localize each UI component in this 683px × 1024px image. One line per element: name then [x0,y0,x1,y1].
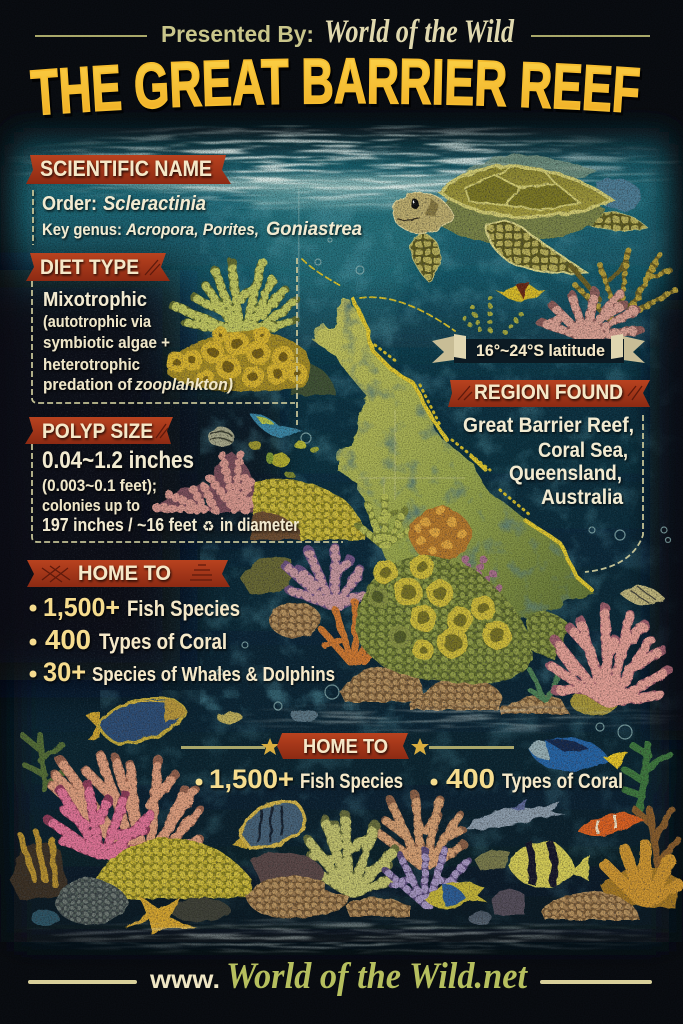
coral: polyp pink [155,452,258,512]
panel: home to [27,560,335,687]
list: home to: 400 [45,624,91,655]
banner: polyp size: POLYP SIZE [42,420,153,443]
fish: small yellow [495,282,546,302]
fish: blue polyp fish [250,414,302,438]
starfish [125,895,197,935]
coral: diet branching [172,262,296,332]
text: scientific name: Order: [42,193,97,215]
water surface light [0,125,683,325]
list: home to [30,592,335,687]
fish: clownfish [578,812,645,836]
coral: polyp shell and algae [208,427,320,478]
dashed frame: region found [585,415,643,572]
coral: lower cream and tan [308,795,468,905]
panel: diet type [26,253,297,425]
turtle [392,154,648,282]
banner: polyp size [25,417,173,444]
panel: home to lower [181,733,623,794]
streak: mid water band [242,704,670,734]
text: polyp size: 197 inches / ~16 feet [42,515,197,535]
banner: home to: HOME TO [78,562,171,585]
list: home to lower: Types of Coral [502,770,623,793]
header presented by [35,14,650,50]
coral: polyp yellow mound [250,479,365,540]
text: polyp size: (0.003~0.1 feet); [42,476,157,495]
text: diet type: zooplahkton) [134,375,233,394]
text: diet type [43,289,233,394]
banner: region found: REGION FOUND [474,381,623,404]
header presented by: World of the Wild [324,14,514,50]
fish: striped butterfly [508,841,590,888]
footer website: www. [149,966,220,994]
banner: home to lower: HOME TO [303,736,388,758]
panel: region found [448,380,650,572]
seaweed [22,735,678,880]
fish: large blue angelfish [85,698,186,744]
list: home to lower [196,763,623,794]
banner: scientific name: SCIENTIFIC NAME [40,156,212,181]
list: home to: 30+ [43,657,86,687]
banner: home to lower [181,733,514,759]
footer website [28,956,652,997]
text: polyp size: ♻ [202,518,215,534]
text: diet type: symbiotic algae + [43,333,170,352]
text: diet type: Mixotrophic [43,289,147,311]
title: THE GREAT BARRIER REEF [32,61,642,118]
list: home to lower: Fish Species [300,770,403,793]
title: THE GREAT BARRIER REEF [30,58,640,116]
coral: top right reef [462,250,675,338]
text: scientific name: Goniastrea [266,219,362,240]
header presented by: Presented By: [161,21,314,47]
text: region found: Queensland, [509,462,622,485]
text: region found: Coral Sea, [538,439,628,462]
rocks: lower reef [31,850,640,926]
list: home to: Types of Coral [99,629,227,654]
coral: right pink [525,608,668,702]
reef line on map [302,259,592,590]
coral: central reef branching [240,497,503,605]
ribbon: latitude: 16°~24°S latitude [476,341,605,360]
text: diet type: predation of [43,375,132,394]
list: home to: 1,500+ [43,592,120,622]
text: region found: Australia [541,486,623,509]
banner: diet type [26,253,170,281]
list: home to: Species of Whales & Dolphins [92,664,335,686]
bubbles and reef specks [217,229,670,739]
coral: large central brain coral [356,555,533,683]
dashed frame: diet type [32,258,297,425]
text: polyp size [42,447,299,535]
coral: lower left pink [10,755,200,900]
panel: scientific name [26,155,362,245]
text: polyp size: in diameter [220,515,299,535]
text: scientific name: Scleractinia [103,193,206,215]
text: polyp size: 0.04~1.2 inches [42,447,194,474]
dashed frame: polyp size [32,444,343,542]
map of Queensland coast [315,298,593,620]
text: region found [463,414,634,509]
text: scientific name [33,190,362,245]
fish: blue yellow bottom [425,881,487,909]
text: region found: Great Barrier Reef, [463,414,634,437]
ribbon: latitude [432,334,645,363]
coral: diet brain mound [168,330,335,395]
banner: home to [27,560,230,587]
list: home to lower: 1,500+ [209,764,294,794]
list: home to lower: 400 [446,763,495,794]
text: polyp size: colonies up to [42,496,140,515]
fish: tan striped [620,585,665,606]
fish: angelfish striped [232,802,305,848]
coral: lower right orange [600,845,680,908]
fish: silver [465,800,566,829]
fish: small upper school [217,710,319,724]
footer website: World of the Wild.net [226,956,529,997]
banner: diet type: DIET TYPE [40,256,139,279]
coral: lower yellow brain [95,838,252,900]
text: diet type: (autotrophic via [43,312,151,331]
panel: polyp size [25,417,343,542]
text: diet type: heterotrophic [43,355,140,374]
coral: central orange and rocks [269,602,619,715]
text: scientific name: Acropora, Porites, [125,220,259,239]
text: scientific name: Key genus: [42,220,122,239]
banner: region found [448,380,650,407]
seabed [39,918,647,954]
fish: blue tang [528,737,627,771]
list: home to: Fish Species [127,596,240,621]
